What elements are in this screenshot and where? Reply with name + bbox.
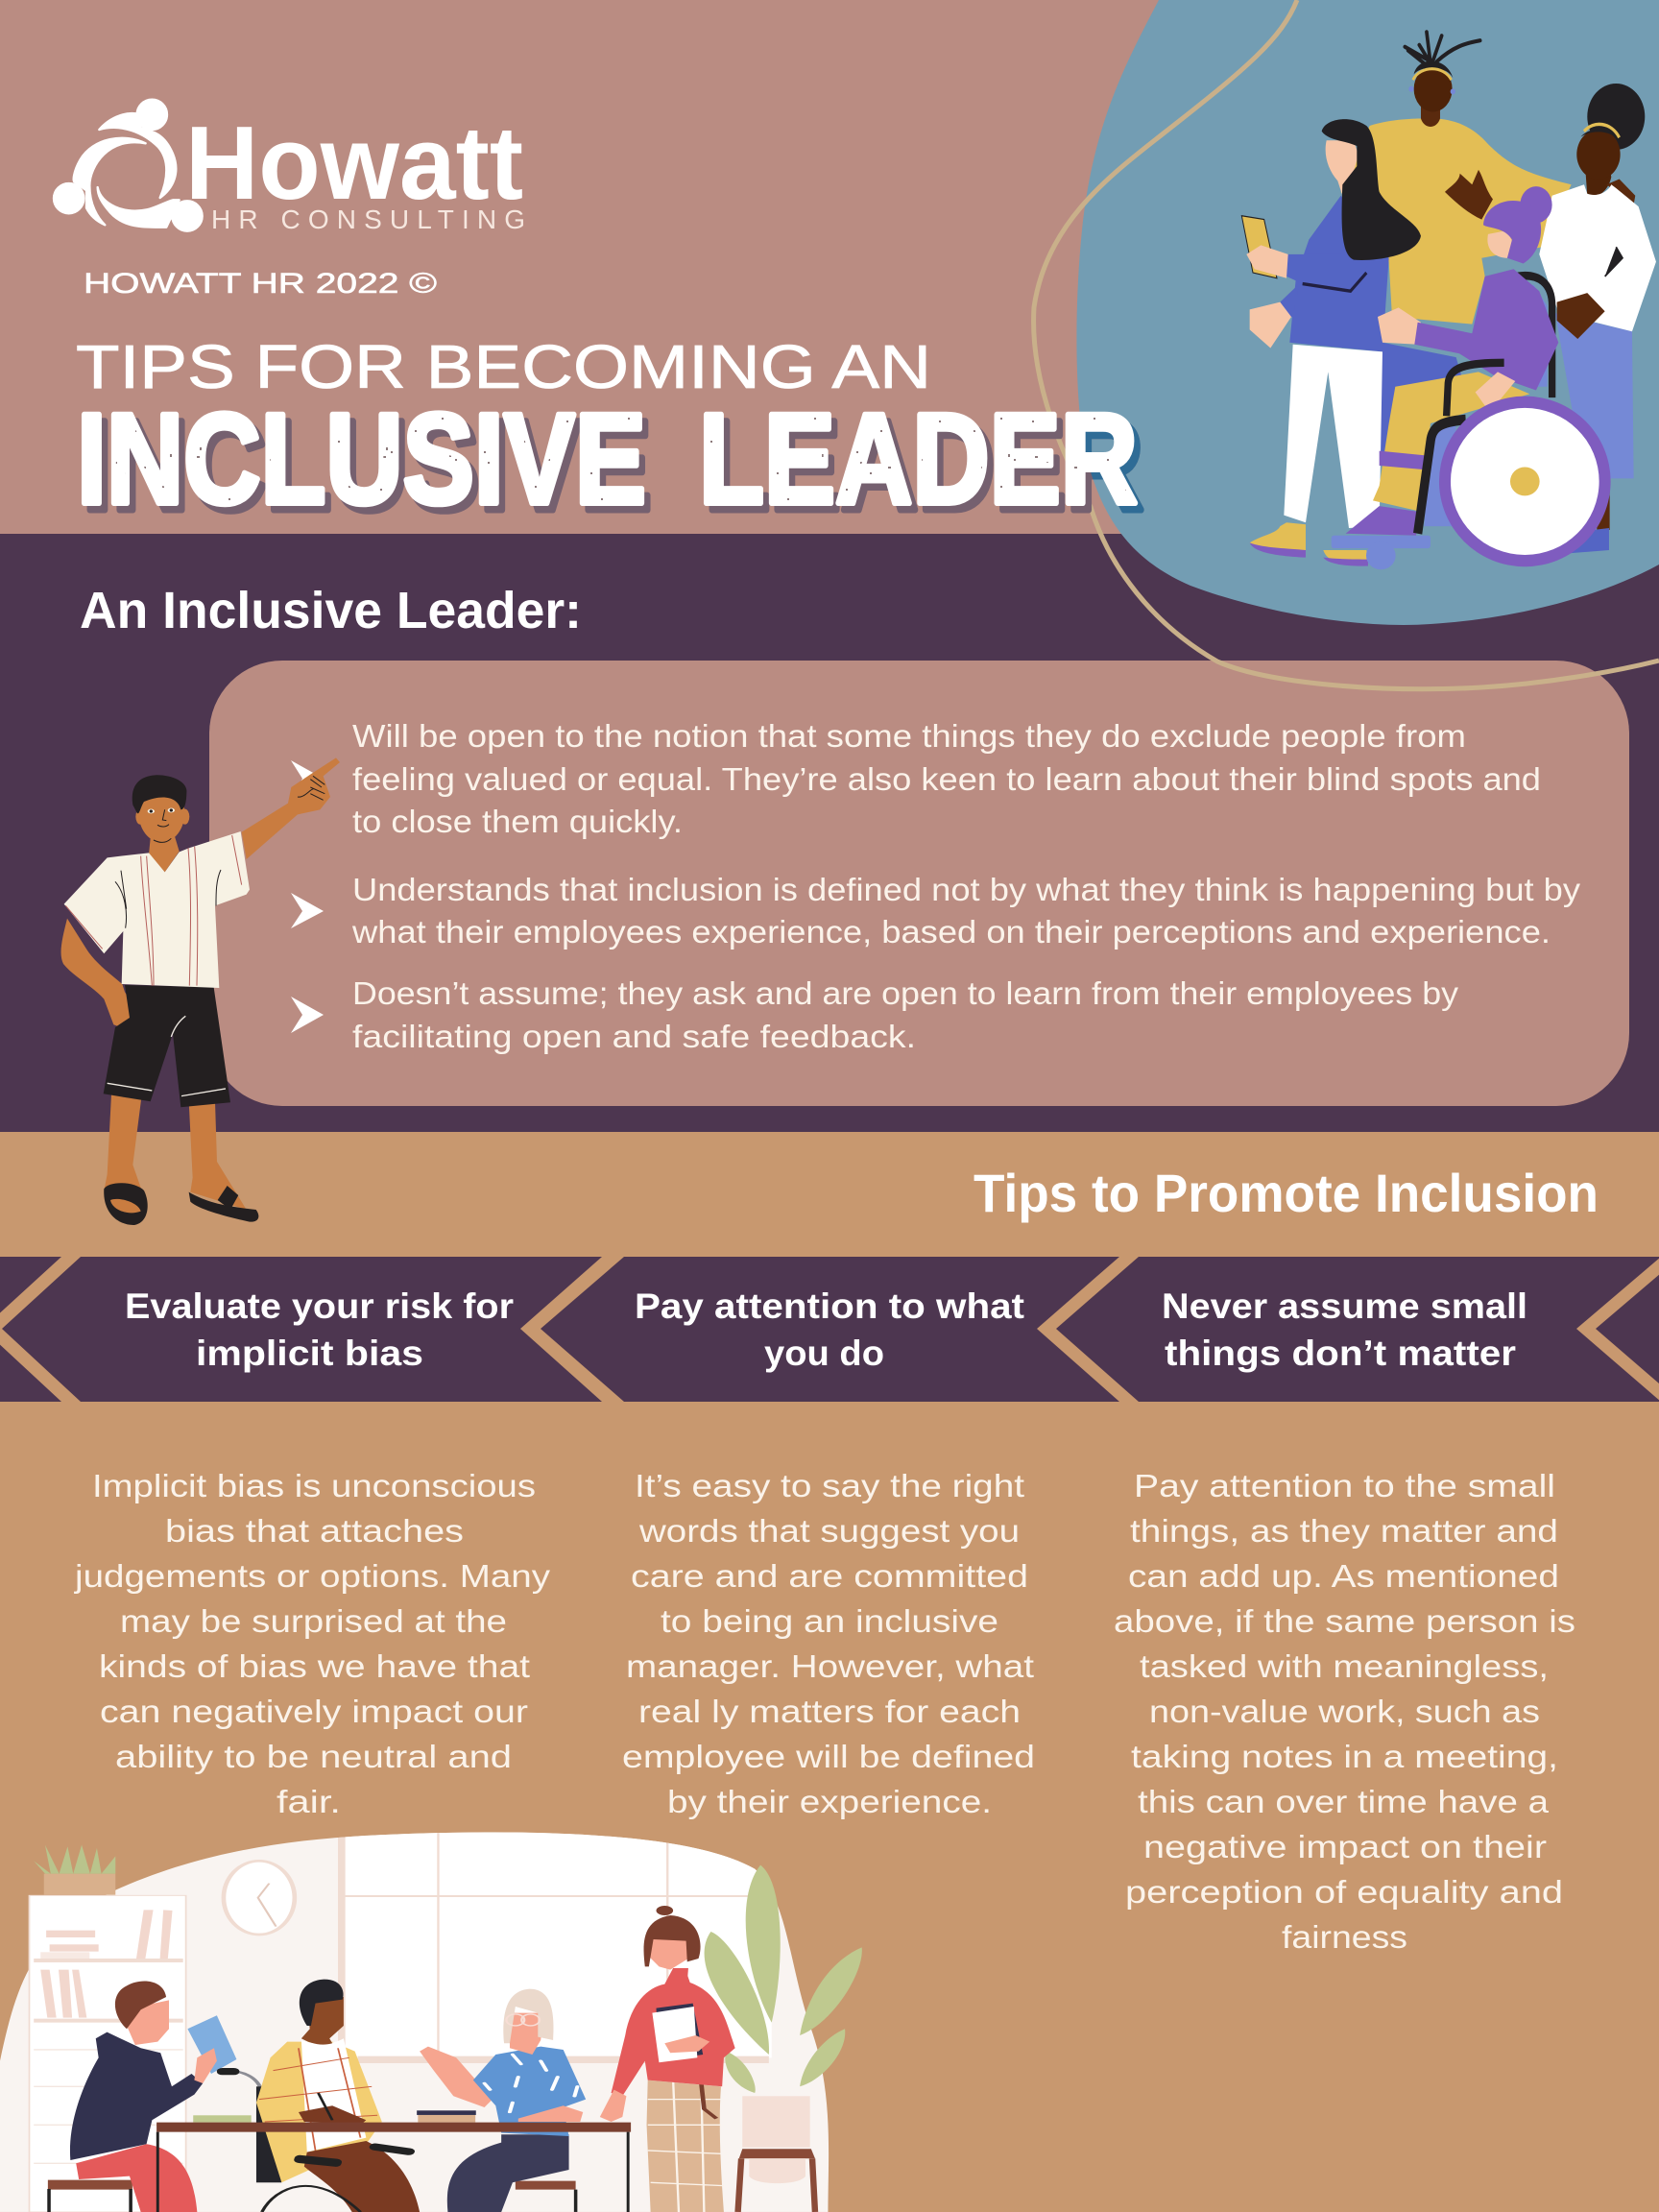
bookshelf (30, 1895, 186, 2212)
chevron label: never assume: Never assume small (1162, 1286, 1527, 1326)
column three body text: Pay attention to the small (1134, 1468, 1555, 1503)
column two body text: words that suggest you (638, 1513, 1020, 1549)
illustration: diverse group of people (1241, 32, 1656, 569)
chevron label: evaluate: implicit bias (196, 1334, 423, 1373)
column two body text: real ly matters for each (638, 1694, 1021, 1729)
column one body text: can negatively impact our (100, 1694, 528, 1729)
column two body text: by their experience. (667, 1784, 992, 1819)
chevron banner (0, 1257, 1659, 1402)
column two body text: to being an inclusive (661, 1603, 998, 1639)
meeting table with items (156, 2110, 631, 2212)
column three body text: perception of equality and (1125, 1874, 1563, 1910)
column three body text: can add up. As mentioned (1128, 1558, 1559, 1594)
tan tips background (0, 1132, 1659, 2212)
logo: Howatt HR Consulting: HR CONSULTING (211, 204, 525, 234)
illustration: pointing man (61, 757, 340, 1225)
title line one: TIPS FOR BECOMING AN (76, 332, 931, 401)
person: woman with phone (1241, 119, 1421, 566)
chevron label: pay attention: Pay attention to what (635, 1286, 1024, 1326)
logo: Howatt HR Consulting: Howatt (185, 105, 523, 222)
column three body text: above, if the same person is (1114, 1603, 1575, 1639)
wall clock (224, 1861, 295, 1935)
title line two with shadow: LEADER (705, 395, 1143, 538)
column one body text: judgements or options. Many (74, 1558, 551, 1594)
chevron label: pay attention: you do (764, 1334, 884, 1373)
column three body text: fairness (1282, 1919, 1407, 1955)
column two body text: employee will be defined (622, 1739, 1035, 1774)
column three body text: negative impact on their (1143, 1829, 1547, 1864)
column three body text: taking notes in a meeting, (1131, 1739, 1558, 1774)
column two body text: It’s easy to say the right (635, 1468, 1024, 1503)
decorative curved line (1034, 0, 1659, 689)
column one body text: Implicit bias is unconscious (92, 1468, 536, 1503)
column three body text: tasked with meaningless, (1140, 1648, 1549, 1684)
bullet text block: Doesn’t assume; they ask and are open to learn from their employees by (352, 975, 1459, 1011)
chevron label: evaluate: Evaluate your risk for (125, 1286, 514, 1326)
chevron label: never assume: things don’t matter (1165, 1334, 1516, 1373)
tall plant with pot (705, 1865, 862, 2212)
column two body text: care and are committed (631, 1558, 1028, 1594)
bullet text block: Understands that inclusion is defined not by what they think is happening but by (352, 872, 1581, 907)
title line two with shadow: LEADER (705, 395, 1143, 538)
column one body text (74, 1468, 551, 1819)
column three body text: this can over time have a (1138, 1784, 1550, 1819)
title line two with shadow: LEADER (699, 388, 1138, 531)
bullet text block: what their employees experience, based on their perceptions and experience. (351, 914, 1551, 950)
column one body text: kinds of bias we have that (99, 1648, 530, 1684)
bullet text block: facilitating open and safe feedback. (352, 1019, 916, 1054)
person: yellow top with locs (1341, 32, 1572, 460)
title line two with shadow (81, 410, 1144, 515)
bullet text block: to close them quickly. (352, 804, 683, 839)
person: white top with afro (1539, 84, 1656, 554)
chevron label: evaluate (125, 1286, 514, 1373)
chevron label: pay attention (635, 1286, 1024, 1373)
heading: An Inclusive Leader: An Inclusive Leader: (80, 582, 582, 639)
bullet text block: Will be open to the notion that some things they do exclude people from (352, 718, 1466, 754)
column one body text: bias that attaches (165, 1513, 464, 1549)
column three body text: things, as they matter and (1130, 1513, 1558, 1549)
heading: Tips to Promote Inclusion: Tips to Promote Inclusion (974, 1163, 1599, 1223)
bullet text block (351, 718, 1581, 1054)
header background band (0, 0, 1659, 534)
scene background blob with window (0, 1805, 845, 2212)
title line two with shadow: INCLUSIVE (83, 395, 652, 538)
chevron label: never assume (1162, 1286, 1527, 1373)
blue blob behind people (1076, 0, 1659, 625)
illustration: team meeting scene (0, 1805, 862, 2212)
column one body text: fair. (276, 1784, 341, 1819)
title line two with shadow: INCLUSIVE (77, 388, 646, 531)
column three body text: non-value work, such as (1149, 1694, 1540, 1729)
logo: Howatt HR Consulting (54, 100, 525, 234)
column one body text: may be surprised at the (120, 1603, 507, 1639)
person: seated in wheelchair (1332, 186, 1611, 569)
bullet text block: feeling valued or equal. They’re also keen to learn about their blind spots and (352, 761, 1541, 797)
purple definition band (0, 534, 1659, 1133)
potted plant on shelf (34, 1845, 115, 1895)
column two body text: manager. However, what (626, 1648, 1034, 1684)
person: navy hoodie reading (48, 1982, 236, 2212)
copyright line: HOWATT HR 2022 © (84, 268, 437, 300)
panel: inclusive leader definition (209, 661, 1629, 1106)
person: standing woman in red with clipboard (600, 1906, 735, 2212)
column two body text (622, 1468, 1035, 1819)
person: older woman gesturing (420, 1989, 586, 2212)
column three body text (1114, 1468, 1575, 1955)
person: wheelchair user writing (217, 1980, 420, 2212)
column one body text: ability to be neutral and (115, 1739, 512, 1774)
bullet arrows (291, 760, 324, 1033)
